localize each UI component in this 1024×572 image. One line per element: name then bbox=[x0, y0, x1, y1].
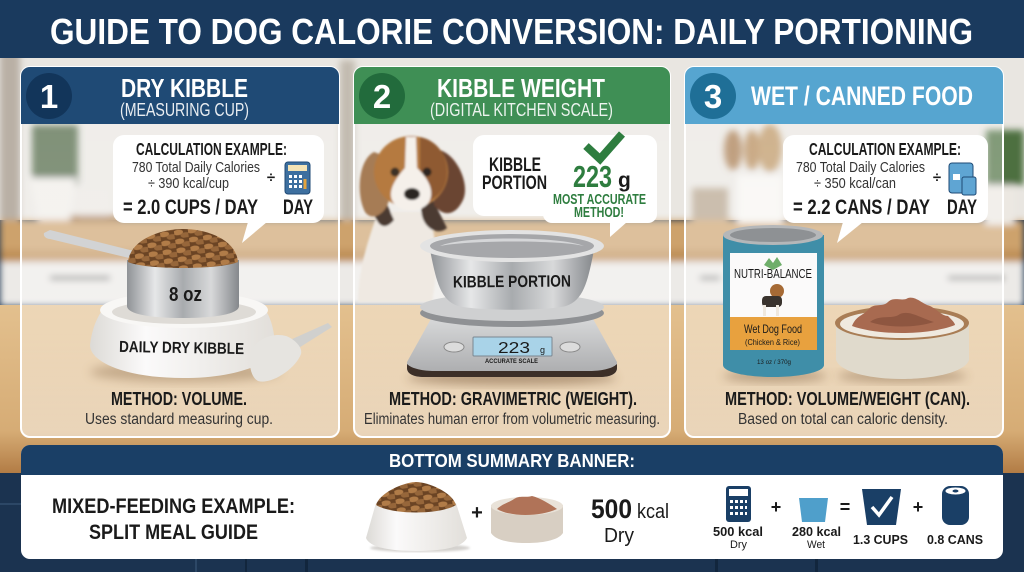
icon: dog food can bbox=[723, 225, 827, 382]
icon: scale: 223 bbox=[498, 340, 530, 357]
icon: check mark bbox=[586, 134, 622, 159]
mixed feeding heading: SPLIT MEAL GUIDE bbox=[89, 521, 258, 544]
callout: kibble portion: METHOD! bbox=[574, 205, 624, 221]
panel 1 header: 1 bbox=[40, 78, 58, 115]
500 kcal dry: Dry bbox=[604, 525, 634, 547]
icon: calculator bbox=[726, 486, 751, 522]
callout: calculation example: 780 Total Daily Calories bbox=[796, 159, 925, 176]
callout: calculation example bbox=[783, 135, 988, 243]
panel 3 header: 3 bbox=[704, 78, 722, 115]
callout: calculation example: DAY bbox=[947, 196, 977, 219]
summary labels: 500 kcal bbox=[713, 524, 763, 539]
panel 2 header bbox=[354, 67, 670, 124]
callout: calculation example: CALCULATION EXAMPLE: bbox=[809, 139, 961, 159]
icon: scale: g bbox=[540, 345, 545, 355]
icon: steel bowl: KIBBLE PORTION bbox=[453, 272, 571, 292]
panel 1 header bbox=[21, 67, 339, 124]
callout: kibble portion: MOST ACCURATE bbox=[553, 192, 646, 208]
method text 3 bbox=[725, 389, 970, 428]
plus: + bbox=[471, 502, 483, 524]
panel 2: kibble weight bbox=[354, 67, 670, 437]
method text 1: Uses standard measuring cup. bbox=[85, 411, 273, 428]
method text 1: METHOD: VOLUME. bbox=[111, 389, 247, 409]
callout: kibble portion: KIBBLE bbox=[489, 155, 541, 176]
icon: dog food can: NUTRI-BALANCE bbox=[734, 266, 812, 281]
icon: measuring cup in bowl: DAILY DRY KIBBLE bbox=[119, 339, 244, 358]
icon: dog food can: 13 oz / 370g bbox=[757, 359, 791, 366]
icon: scoop bbox=[250, 323, 332, 382]
panel 3 header bbox=[685, 67, 1003, 124]
icon: can bbox=[942, 486, 969, 525]
summary labels: Wet bbox=[807, 539, 825, 551]
icon: calculator bbox=[285, 162, 310, 194]
summary labels: Dry bbox=[730, 539, 747, 551]
plus: + bbox=[771, 497, 781, 517]
icon: dog food can: (Chicken & Rice) bbox=[745, 338, 800, 347]
callout: calculation example: ÷ 350 kcal/can bbox=[814, 175, 896, 192]
icon: measuring cup in bowl: 8 oz bbox=[169, 284, 202, 306]
title banner bbox=[0, 0, 1024, 58]
callout: calculation example: ÷ bbox=[933, 169, 941, 186]
panel 3 header: WET / CANNED FOOD bbox=[751, 81, 973, 111]
callout: kibble portion: g bbox=[618, 169, 631, 192]
bottom summary banner bbox=[21, 445, 1003, 559]
icon: dry kibble bowl bbox=[366, 482, 470, 552]
callout: calculation example: CALCULATION EXAMPLE: bbox=[136, 139, 287, 159]
method text 2: Eliminates human error from volumetric measuring. bbox=[364, 411, 660, 428]
500 kcal dry: kcal bbox=[637, 501, 669, 523]
callout: calculation example bbox=[113, 135, 324, 243]
method text 1 bbox=[85, 389, 273, 428]
method text 3: METHOD: VOLUME/WEIGHT (CAN). bbox=[725, 389, 970, 409]
plus: + bbox=[913, 497, 923, 517]
callout: kibble portion: PORTION bbox=[482, 173, 547, 194]
panel 3: wet food bbox=[685, 67, 1003, 437]
summary labels: 280 kcal bbox=[792, 524, 841, 539]
callout: kibble portion: 223 bbox=[573, 159, 612, 194]
mixed feeding heading bbox=[52, 495, 295, 544]
summary labels: 0.8 CANS bbox=[927, 532, 983, 547]
icon: steel bowl bbox=[420, 230, 604, 310]
icon: wet food bowl bbox=[835, 298, 969, 382]
callout: calculation example: = 2.0 CUPS / DAY bbox=[123, 196, 258, 219]
panel 1 header: (MEASURING CUP) bbox=[120, 100, 249, 120]
summary labels: 1.3 CUPS bbox=[853, 532, 908, 547]
panel 2 header: (DIGITAL KITCHEN SCALE) bbox=[430, 100, 613, 120]
icon: scale: ACCURATE SCALE bbox=[485, 358, 539, 365]
icon: water cup bbox=[799, 498, 828, 522]
panel 2 header: 2 bbox=[373, 78, 391, 115]
illustration: beagle puppy bbox=[358, 136, 465, 302]
icon: check cup bbox=[862, 489, 901, 525]
method text 3: Based on total can caloric density. bbox=[738, 411, 948, 428]
callout: calculation example: ÷ 390 kcal/cup bbox=[148, 175, 229, 192]
icon: small dog on label bbox=[762, 284, 784, 316]
equals: = bbox=[840, 497, 850, 517]
500 kcal dry: 500 bbox=[591, 494, 632, 524]
icon: measuring cup in bowl bbox=[44, 229, 280, 382]
callout: calculation example: = 2.2 CANS / DAY bbox=[793, 196, 930, 219]
summary labels bbox=[713, 524, 983, 551]
panel 1 header: DRY KIBBLE bbox=[121, 73, 248, 103]
banner header: BOTTOM SUMMARY BANNER: bbox=[389, 451, 635, 471]
mixed feeding heading: MIXED-FEEDING EXAMPLE: bbox=[52, 495, 295, 518]
icon: cans bbox=[949, 163, 976, 195]
panel 1: dry kibble bbox=[21, 67, 339, 437]
banner header bbox=[21, 445, 1003, 475]
callout: calculation example: DAY bbox=[283, 196, 313, 219]
callout: calculation example: ÷ bbox=[267, 169, 275, 186]
method text 2: METHOD: GRAVIMETRIC (WEIGHT). bbox=[389, 389, 637, 409]
icon: dog food can: Wet Dog Food bbox=[744, 322, 802, 336]
callout: kibble portion bbox=[473, 134, 657, 237]
500 kcal dry bbox=[591, 494, 669, 547]
method text 2 bbox=[364, 389, 660, 428]
callout: calculation example: 780 Total Daily Calories bbox=[132, 159, 260, 176]
panel 2 header: KIBBLE WEIGHT bbox=[437, 73, 605, 103]
icon: scale bbox=[407, 293, 617, 385]
icon: wet food bowl bbox=[491, 496, 563, 543]
